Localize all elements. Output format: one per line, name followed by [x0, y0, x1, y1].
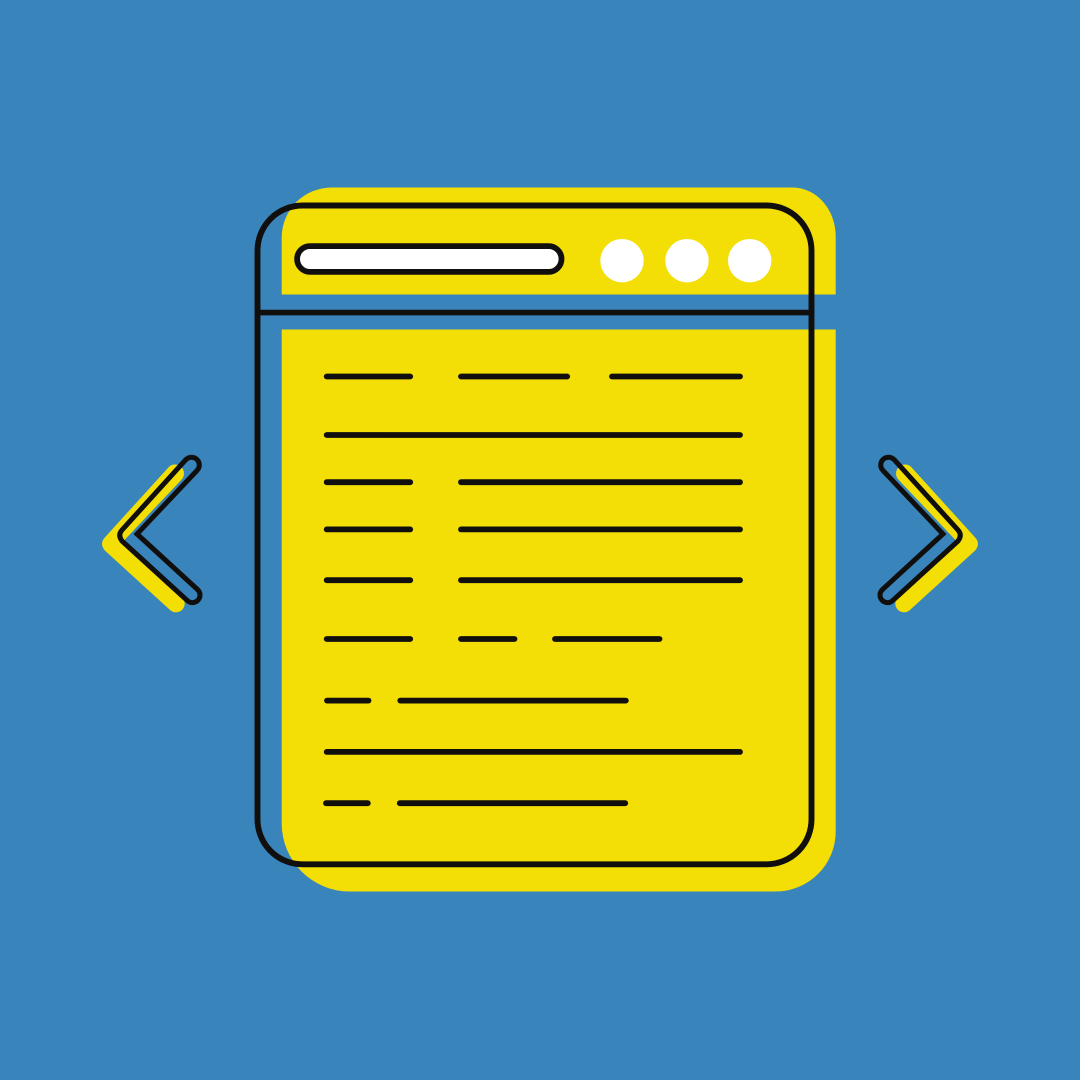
header divider line — [258, 310, 812, 315]
panel: yellow window body — [282, 330, 836, 892]
address bar — [297, 246, 562, 272]
window outline — [258, 206, 812, 864]
text placeholder lines — [326, 376, 740, 803]
icon: right arrow — [880, 457, 977, 611]
panel: yellow window header — [282, 188, 836, 294]
window control buttons — [600, 239, 771, 282]
icon: left arrow — [103, 457, 200, 611]
